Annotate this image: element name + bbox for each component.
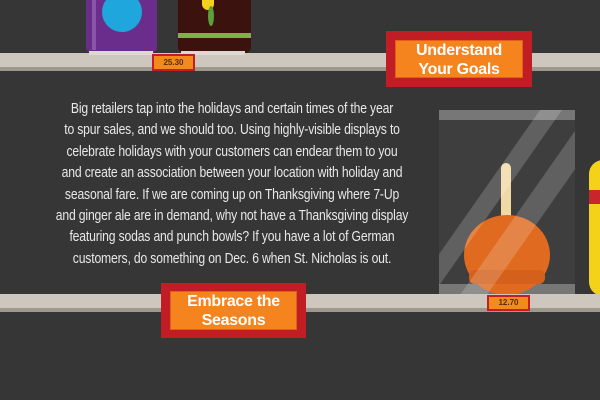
body text: and create an association between your location with holiday and: [62, 165, 402, 181]
sign: Embrace the Seasons: Seasons: [202, 312, 265, 329]
price tag 25.30: [152, 54, 195, 71]
brown jar: [178, 0, 251, 53]
body text: Big retailers tap into the holidays and certain times of the year: [71, 101, 393, 117]
body text: customers, do something on Dec. 6 when St. Nicholas is out.: [73, 251, 391, 267]
yellow bottle: [589, 160, 600, 296]
shelf top: [0, 53, 600, 71]
purple can: [86, 0, 157, 53]
price tag 12.70: 12.70: [498, 298, 519, 307]
price tag 25.30: 25.30: [163, 58, 184, 67]
sign: Embrace the Seasons: [161, 283, 306, 338]
sign: Understand Your Goals: Your Goals: [418, 61, 500, 78]
body text: [56, 101, 408, 267]
shelf bottom: [0, 294, 600, 312]
body text: seasonal fare. If we are coming up on Thanksgiving where 7-Up: [65, 187, 399, 203]
body text: featuring sodas and punch bowls? If you have a lot of German: [69, 229, 395, 245]
body text: to spur sales, and we should too. Using highly-visible displays to: [64, 122, 400, 138]
sign: Understand Your Goals: Understand: [416, 42, 502, 59]
sign: Embrace the Seasons: Embrace the: [187, 293, 280, 310]
candy apple display case: [439, 110, 575, 294]
body text: celebrate holidays with your customers can endear them to you: [67, 144, 397, 160]
price tag 12.70: [487, 295, 530, 311]
body text: and ginger ale are in demand, why not have a Thanksgiving display: [56, 208, 408, 224]
sign: Understand Your Goals: [386, 31, 532, 87]
